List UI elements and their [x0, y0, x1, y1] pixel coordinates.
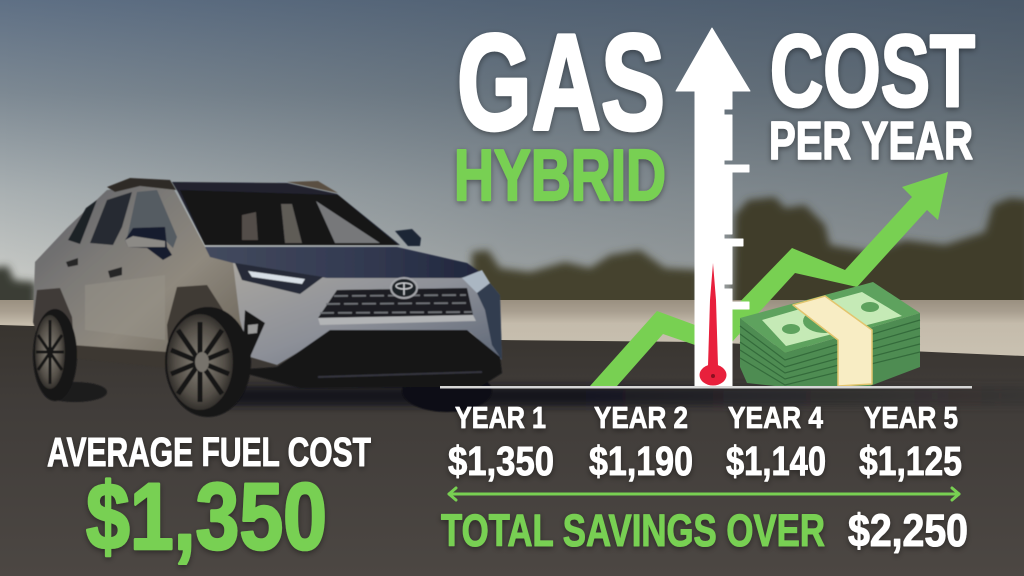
icon: stack of cash — [740, 282, 920, 386]
car: grille — [318, 288, 476, 325]
background: road — [0, 325, 1024, 576]
thermometer: red mercury — [700, 263, 726, 386]
background: blurred tree line — [0, 197, 1024, 325]
car: front fascia — [233, 263, 502, 365]
car: roof — [172, 182, 400, 245]
car: far mirror — [395, 229, 421, 246]
heading: GAS: GAS — [457, 6, 665, 158]
arrow: double-headed span — [449, 488, 959, 500]
heading: HYBRID: HYBRID — [454, 136, 666, 216]
text: average fuel cost value: $1,350 — [86, 464, 327, 570]
car: Toyota emblem — [391, 278, 417, 298]
car: rear wheel — [33, 309, 77, 401]
chart: green rising arrow — [590, 172, 948, 386]
car: door handles — [66, 258, 78, 267]
car: windshield — [180, 190, 398, 245]
cash: paper band — [793, 296, 872, 386]
car: side windows — [68, 190, 177, 248]
table: year labels: YEAR 4 — [728, 400, 824, 435]
car: sill cladding — [72, 345, 167, 368]
background: sky — [0, 0, 1024, 310]
table: year labels: YEAR 5 — [864, 400, 958, 435]
table: yearly costs — [448, 438, 962, 484]
background: roadside wall — [0, 300, 1024, 356]
car: front wheel — [165, 307, 251, 417]
table: yearly costs: $1,140 — [726, 438, 826, 484]
car: hood — [205, 247, 483, 278]
car: far roof rail — [287, 181, 338, 193]
text: total savings value: $2,250 — [848, 505, 968, 556]
table: yearly costs: $1,350 — [448, 438, 554, 484]
car: fog lamp — [243, 310, 265, 357]
car: rear wheel arch — [33, 288, 75, 375]
car: right front fender — [477, 283, 502, 360]
background: dark shadow band under car — [210, 386, 1024, 406]
car: far front tyre — [402, 370, 492, 412]
car: rear tyre shadow — [43, 382, 107, 402]
car: headlight right — [462, 270, 490, 293]
car: headlight left — [235, 263, 323, 294]
car: lower intake — [233, 330, 502, 388]
car: Toyota RAV4 hybrid SUV — [33, 178, 502, 417]
table: year labels: YEAR 2 — [594, 400, 688, 435]
cash: stack sides — [740, 313, 920, 386]
car: roof rail — [107, 178, 176, 192]
chart: baseline — [440, 386, 972, 388]
car: front wheel arch — [167, 285, 233, 392]
cash: top bill — [740, 282, 920, 353]
car: side mirror — [125, 227, 172, 260]
table: year labels: YEAR 1 — [455, 400, 546, 435]
chart: white thermometer arrow — [676, 28, 750, 386]
text: average fuel cost label: AVERAGE FUEL COST — [47, 429, 371, 475]
car: body side — [33, 182, 245, 372]
table: yearly costs: $1,190 — [589, 438, 693, 484]
table: yearly costs: $1,125 — [859, 438, 962, 484]
table: year labels — [455, 400, 958, 435]
car: door highlight — [85, 275, 165, 340]
text: total savings label: TOTAL SAVINGS OVER — [441, 505, 825, 556]
